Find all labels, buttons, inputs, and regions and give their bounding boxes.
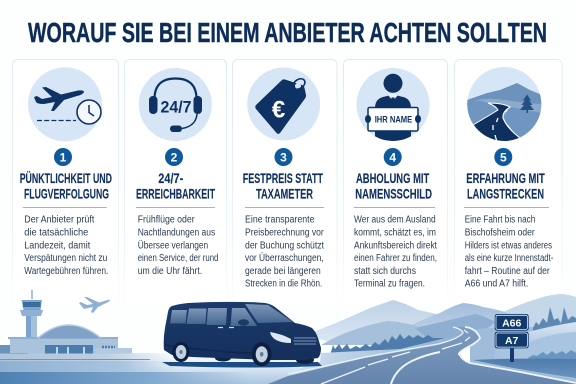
body text: Eine transparente bbox=[245, 215, 315, 226]
body text: Der Anbieter prüft bbox=[24, 215, 94, 226]
road sign A66 / A7: A7 bbox=[505, 335, 519, 347]
heading: FLUGVERFOLGUNG bbox=[24, 186, 109, 202]
body text: vor Überraschungen, bbox=[245, 252, 324, 264]
panel: 24/7-Erreichbarkeit bbox=[124, 60, 226, 306]
heading: NAMENSSCHILD bbox=[355, 186, 432, 202]
body text: einen Service, der rund bbox=[138, 253, 218, 264]
body text bbox=[138, 215, 218, 277]
heading: 24/7- bbox=[158, 170, 184, 186]
panel: Festpreis statt Taxameter bbox=[232, 60, 337, 306]
body text: A66 und A7 hilft. bbox=[465, 278, 528, 290]
body text bbox=[245, 215, 324, 290]
icon: winding road landscape bbox=[466, 67, 542, 146]
scene: mountains and road bbox=[288, 294, 576, 384]
terminal building bbox=[0, 325, 132, 354]
scene: airport ground bbox=[0, 353, 300, 384]
road sign A66 / A7: A66 bbox=[502, 318, 521, 330]
body text: Eine Fahrt bis nach bbox=[465, 215, 535, 226]
icon: person holding name sign bbox=[356, 68, 430, 145]
number 3: 3 bbox=[280, 150, 287, 164]
number 5: 5 bbox=[500, 150, 507, 164]
body text: Terminal zu fragen. bbox=[354, 278, 425, 290]
icon: plane with clock bbox=[28, 67, 102, 141]
van bbox=[162, 302, 322, 368]
body text: Wer aus dem Ausland bbox=[354, 215, 436, 226]
road sign A66 / A7 bbox=[495, 314, 529, 362]
heading: ABHOLUNG MIT bbox=[356, 170, 430, 186]
number 1: 1 bbox=[60, 150, 67, 164]
airport: control tower and terminal bbox=[0, 290, 132, 354]
heading bbox=[466, 170, 545, 202]
body text: um die Uhr fährt. bbox=[138, 266, 202, 277]
panel: Pünktlichkeit und Flugverfolgung bbox=[12, 60, 118, 306]
body text: einen Fahrer zu finden, bbox=[354, 253, 437, 264]
body text: Wartegebühren führen. bbox=[24, 266, 108, 277]
body text bbox=[354, 215, 437, 290]
heading: TAXAMETER bbox=[256, 186, 313, 202]
headlight and grille bbox=[270, 332, 291, 343]
body text: Bischofsheim oder bbox=[465, 228, 535, 238]
number 2 bbox=[165, 148, 183, 166]
wheels bbox=[172, 342, 272, 366]
body text: gerade bei längeren bbox=[245, 266, 321, 277]
heading: ERREICHBARKEIT bbox=[136, 186, 215, 202]
body text bbox=[465, 215, 553, 290]
body text: Landezeit, damit bbox=[24, 240, 90, 251]
panel: Erfahrung mit Langstrecken bbox=[454, 60, 562, 306]
scene: road bbox=[268, 327, 576, 384]
body text: Frühflüge oder bbox=[138, 215, 195, 226]
number 3 bbox=[274, 148, 292, 166]
right hills bbox=[470, 318, 576, 384]
body text: Strecken in die Rhön. bbox=[245, 278, 322, 290]
body text: die tatsächliche bbox=[24, 228, 89, 238]
heading bbox=[136, 170, 215, 202]
body text: Nachtlandungen aus bbox=[138, 228, 215, 238]
panel: Abholung mit Namensschild bbox=[344, 60, 448, 306]
number 4: 4 bbox=[389, 150, 396, 164]
heading: PÜNKTLICHKEIT UND bbox=[20, 170, 112, 186]
heading bbox=[355, 170, 432, 202]
number 5 bbox=[494, 148, 512, 166]
heading: FESTPREIS STATT bbox=[243, 170, 323, 186]
number 1 bbox=[54, 148, 72, 166]
body text: Übersee verlangen bbox=[138, 239, 208, 251]
body text: statt sich durchs bbox=[354, 266, 416, 277]
icon: euro price tag bbox=[247, 68, 320, 140]
small plane in sky bbox=[79, 297, 110, 313]
heading bbox=[20, 170, 112, 202]
body text bbox=[24, 215, 108, 277]
icon: headset bbox=[139, 68, 212, 141]
body text: kommt, schätzt es, im bbox=[354, 228, 436, 238]
windows bbox=[170, 304, 293, 326]
icon: person holding name sign: IHR NAME bbox=[375, 114, 412, 126]
number 4 bbox=[384, 148, 402, 166]
tree line right bbox=[533, 307, 576, 332]
body text: Verspätungen nicht zu bbox=[24, 253, 107, 264]
body text: als eine kurze Innenstadt- bbox=[465, 253, 553, 264]
icon: euro price tag: € bbox=[272, 96, 285, 124]
icon: headset: 24/7 bbox=[160, 98, 192, 117]
body text: Preisberechnung vor bbox=[245, 228, 324, 238]
tree line left bbox=[331, 334, 445, 354]
body text: fahrt – Routine auf der bbox=[465, 266, 550, 277]
shadow bbox=[162, 362, 322, 368]
body text: der Buchung schützt bbox=[245, 240, 324, 251]
heading bbox=[243, 170, 323, 202]
body text: Hilders ist etwas anderes bbox=[465, 240, 552, 251]
body text: Ankunftsbereich direkt bbox=[354, 240, 437, 251]
icon: fir tree bbox=[520, 94, 534, 113]
number 2: 2 bbox=[171, 150, 178, 164]
